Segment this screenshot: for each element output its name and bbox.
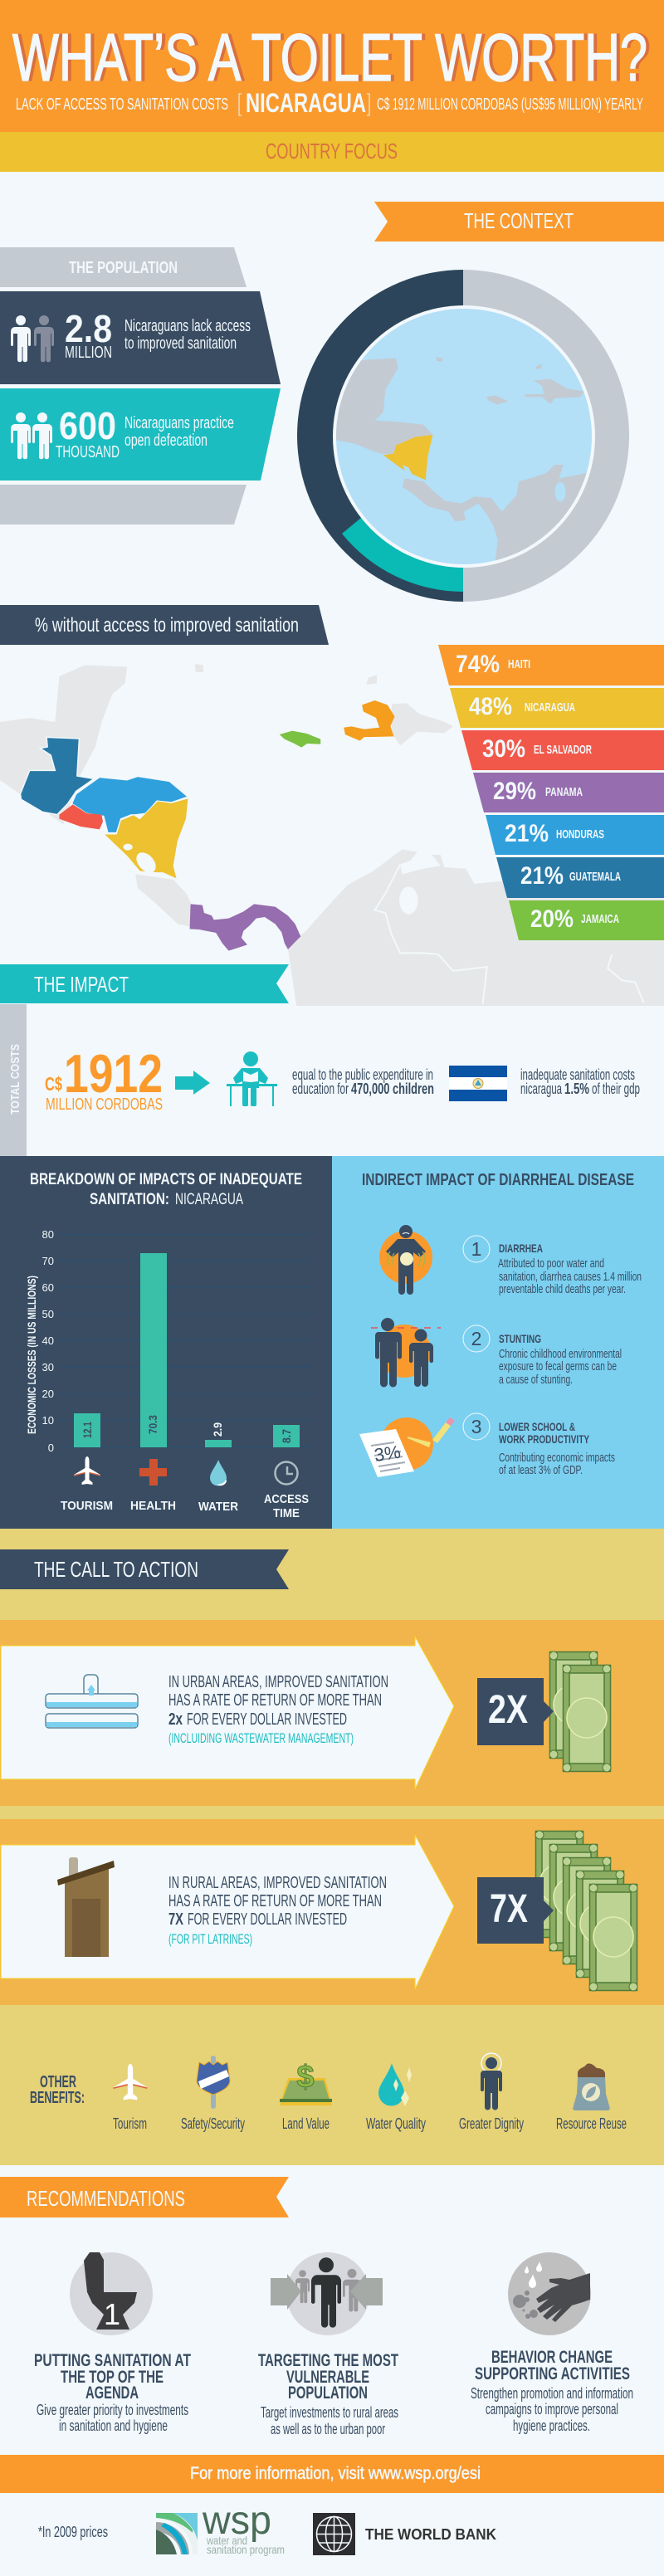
population heading xyxy=(0,247,247,287)
icon: money 7x xyxy=(535,1831,637,1991)
bar: jamaica: 20% xyxy=(530,905,574,933)
benefit: resource reuse xyxy=(556,2063,627,2132)
cost figure: MILLION CORDOBAS xyxy=(46,1095,163,1114)
item 1: 1 xyxy=(471,1238,481,1260)
logo: wsp: water and xyxy=(206,2534,247,2547)
bar: panama: 29% xyxy=(493,778,536,805)
logo: wsp xyxy=(156,2499,285,2556)
recommendation 1 xyxy=(34,2252,191,2434)
country: guatemala xyxy=(20,737,94,815)
bar: haiti: HAITI xyxy=(508,657,530,671)
item 3: Contributing economic impacts xyxy=(499,1451,615,1465)
callout: 7x: 7X xyxy=(490,1887,528,1931)
bar: honduras: HONDURAS xyxy=(556,827,604,842)
item 3: LOWER SCHOOL & xyxy=(499,1420,575,1433)
bar: honduras xyxy=(486,815,664,855)
donut chart with map xyxy=(297,270,629,602)
bar: jamaica xyxy=(509,900,664,940)
item 2: exposure to fecal germs can be xyxy=(499,1360,617,1373)
bar: el salvador: 30% xyxy=(482,735,525,763)
item 1: DIARRHEA xyxy=(499,1242,543,1255)
bar chart: 20 xyxy=(42,1388,54,1400)
ribbon: call to action: THE CALL TO ACTION xyxy=(34,1557,198,1582)
benefit: land value xyxy=(280,2060,332,2132)
bar: nicaragua xyxy=(450,688,664,728)
text: education equivalent xyxy=(292,1066,434,1097)
text: rec 2 xyxy=(258,2351,398,2437)
stat: 2.8 million: 2.8 xyxy=(65,307,112,350)
bar: honduras: 21% xyxy=(505,820,549,847)
bar: guatemala: GUATEMALA xyxy=(569,870,621,884)
other benefits xyxy=(30,2053,627,2132)
text: rec 1: Give greater priority to investments xyxy=(37,2402,188,2418)
bar: haiti: 74% xyxy=(456,651,500,678)
text: rec 2: VULNERABLE xyxy=(286,2368,369,2387)
item 3 xyxy=(463,1413,615,1477)
chart heading: SANITATION: xyxy=(90,1191,169,1208)
logo: world bank: THE WORLD BANK xyxy=(365,2526,496,2543)
population heading: THE POPULATION xyxy=(69,259,178,277)
stat: 600 thousand xyxy=(0,388,281,481)
icon: water drop xyxy=(210,1460,227,1486)
text: urban: FOR EVERY DOLLAR INVESTED xyxy=(187,1710,347,1729)
chart heading: NICARAGUA xyxy=(175,1191,243,1208)
text: rural: IN RURAL AREAS, IMPROVED SANITATION xyxy=(168,1874,387,1892)
item 1 xyxy=(463,1236,642,1296)
country focus band: COUNTRY FOCUS xyxy=(266,139,398,163)
bar: jamaica: JAMAICA xyxy=(581,912,619,926)
text: education equivalent: education for xyxy=(292,1081,349,1097)
text: urban: 2x xyxy=(168,1710,183,1729)
axis labels: TOURISM xyxy=(61,1499,113,1513)
bar chart: ECONOMIC LOSSES (IN US MILLIONS) xyxy=(25,1276,38,1434)
cost figure: C$ xyxy=(45,1073,62,1095)
panel: breakdown chart xyxy=(0,1156,332,1529)
ribbon: call to action xyxy=(0,1549,289,1589)
bar: nicaragua: NICARAGUA xyxy=(525,700,575,715)
ribbon: % without access: % without access to improved sanitation xyxy=(35,614,299,637)
subtitle: LACK OF ACCESS TO SANITATION COSTS xyxy=(16,95,228,114)
callout: 2x xyxy=(477,1678,554,1745)
country: panama xyxy=(190,904,300,951)
text: gdp cost: nicaragua xyxy=(520,1081,563,1097)
background land xyxy=(0,664,664,1006)
text: rural: 7X xyxy=(168,1910,183,1929)
benefit: tourism xyxy=(113,2064,147,2132)
stat: 600 thousand: THOUSAND xyxy=(56,443,120,461)
sidebar label xyxy=(0,1004,27,1156)
logo: wsp: sanitation program xyxy=(207,2543,285,2556)
icon: plane xyxy=(74,1456,100,1485)
benefit: dignity xyxy=(459,2053,524,2132)
text: rec 3 xyxy=(471,2348,633,2434)
stat: 2.8 million: MILLION xyxy=(65,344,112,362)
recommendation 3 xyxy=(471,2252,633,2434)
item 2: a cause of stunting. xyxy=(499,1373,573,1387)
subtitle xyxy=(16,88,643,118)
text: rec 2: Target investments to rural areas xyxy=(261,2404,398,2421)
ribbon: the context: THE CONTEXT xyxy=(464,208,574,233)
axis labels: HEALTH xyxy=(130,1499,176,1513)
icon: latrine xyxy=(57,1857,115,1957)
icon: vulnerable group xyxy=(271,2252,383,2335)
icon: health cross xyxy=(139,1459,167,1486)
ribbon: the impact xyxy=(0,964,289,1003)
bar: el salvador xyxy=(461,730,664,770)
text: gdp cost xyxy=(520,1066,640,1097)
icon: nicaragua flag xyxy=(449,1066,507,1101)
text: rec 1: THE TOP OF THE xyxy=(61,2368,164,2387)
bar chart: 50 xyxy=(42,1308,54,1320)
icon: stunting figures xyxy=(371,1318,441,1388)
item 2 xyxy=(463,1325,622,1387)
axis labels: ACCESS xyxy=(264,1492,309,1506)
stat: 600 thousand: open defecation xyxy=(124,432,208,450)
stat: 600 thousand: Nicaraguans practice xyxy=(124,414,234,432)
footnote: *In 2009 prices xyxy=(38,2524,108,2540)
text: urban: (INCLUIDING WASTEWATER MANAGEMENT) xyxy=(168,1730,354,1746)
text: rec 1: PUTTING SANITATION AT xyxy=(34,2351,191,2370)
footer banner: For more information, visit www.wsp.org/esi xyxy=(190,2464,481,2483)
stat: 2.8 million: to improved sanitation xyxy=(124,334,237,353)
text: gdp cost: 1.5% xyxy=(564,1081,589,1097)
icon: toilet: 1 xyxy=(104,2297,120,2331)
map: caribbean countries xyxy=(0,664,664,1006)
panel: indirect impact xyxy=(332,1156,664,1529)
bar chart: 8.7 xyxy=(280,1429,293,1443)
benefit: land value: Land Value xyxy=(282,2115,330,2132)
country: jamaica xyxy=(280,731,320,748)
icon: sick person xyxy=(379,1225,432,1295)
bar: haiti xyxy=(438,645,664,685)
item 3: of at least 3% of GDP. xyxy=(499,1464,583,1477)
band: urban return xyxy=(0,1620,664,1806)
bar: nicaragua: 48% xyxy=(469,693,512,720)
text: urban: IN URBAN AREAS, IMPROVED SANITATION xyxy=(168,1673,388,1691)
benefit: land value: $ xyxy=(296,2060,315,2095)
bar chart: 10 xyxy=(42,1414,54,1427)
bar: panama xyxy=(473,773,664,812)
stat: 600 thousand: 600 xyxy=(59,404,116,447)
subtitle: NICARAGUA xyxy=(246,88,366,118)
callout: 7x xyxy=(477,1877,554,1944)
cost figure xyxy=(45,1043,163,1114)
text: education equivalent: 470,000 children xyxy=(351,1081,434,1097)
bar: panama: PANAMA xyxy=(545,785,583,799)
panel: call to action xyxy=(0,1529,664,2165)
cost figure: 1912 xyxy=(64,1043,163,1104)
axis labels: WATER xyxy=(198,1500,238,1514)
logo: world bank xyxy=(313,2513,496,2555)
text: rec 3: BEHAVIOR CHANGE xyxy=(491,2348,613,2367)
icon: paper and pencil: 3% xyxy=(373,1442,402,1466)
bar chart: 70.3 xyxy=(146,1415,159,1434)
benefits heading: OTHER xyxy=(40,2073,76,2091)
benefit: safety xyxy=(181,2056,245,2132)
text: rural: FOR EVERY DOLLAR INVESTED xyxy=(188,1910,347,1929)
icon: money 2x xyxy=(549,1651,611,1772)
text: rec 2: TARGETING THE MOST xyxy=(258,2351,398,2370)
text: rec 3: hygiene practices. xyxy=(513,2417,590,2434)
band: rural return xyxy=(0,1819,664,2005)
bar chart: 30 xyxy=(42,1361,54,1373)
benefit: safety: Safety/Security xyxy=(181,2115,245,2132)
text: education equivalent: equal to the public expenditure in xyxy=(292,1066,433,1083)
text: rec 1: in sanitation and hygiene xyxy=(59,2417,168,2434)
text: rural: (FOR PIT LATRINES) xyxy=(168,1931,252,1947)
bar list: countries xyxy=(438,645,664,940)
footer banner xyxy=(0,2455,664,2493)
bar chart: 40 xyxy=(42,1334,54,1347)
icon: child at desk xyxy=(227,1051,277,1106)
ribbon: % without access xyxy=(0,605,329,645)
text: rec 2: as well as to the urban poor xyxy=(271,2421,385,2437)
bar chart: 2.9 xyxy=(211,1422,224,1437)
text: urban: HAS A RATE OF RETURN OF MORE THAN xyxy=(168,1691,382,1710)
item 2: STUNTING xyxy=(499,1332,541,1345)
axis labels: TIME xyxy=(273,1506,300,1520)
bar chart: 80 xyxy=(42,1228,54,1241)
chart heading xyxy=(30,1171,302,1208)
bar: guatemala: 21% xyxy=(520,862,564,890)
panel: total costs xyxy=(0,1004,664,1156)
axis labels xyxy=(61,1492,309,1520)
recommendation 2 xyxy=(258,2252,398,2437)
text: rural xyxy=(168,1874,387,1947)
text: urban xyxy=(168,1673,388,1746)
icon: paper and pencil xyxy=(359,1417,455,1477)
bar: guatemala xyxy=(496,857,664,898)
text: rec 1 xyxy=(34,2351,191,2434)
country: honduras xyxy=(72,777,188,832)
callout: 2x: 2X xyxy=(488,1688,528,1732)
sidebar label: TOTAL COSTS xyxy=(8,1044,22,1115)
benefit: water quality xyxy=(366,2063,426,2132)
item 2: 2 xyxy=(471,1328,481,1349)
benefit: tourism: Tourism xyxy=(113,2115,147,2132)
bar chart: 0 xyxy=(48,1442,54,1454)
chart heading: BREAKDOWN OF IMPACTS OF INADEQUATE xyxy=(30,1171,302,1188)
stat: 2.8 million: Nicaraguans lack access xyxy=(124,317,251,335)
benefit: water quality: Water Quality xyxy=(366,2115,426,2132)
country: nicaragua xyxy=(104,798,188,879)
text: rec 1: AGENDA xyxy=(85,2383,139,2403)
country focus band xyxy=(0,132,664,172)
ribbon: recommendations: RECOMMENDATIONS xyxy=(27,2186,185,2211)
item 3: 3 xyxy=(471,1416,481,1437)
panel: the population xyxy=(0,247,281,524)
item 1: Attributed to poor water and xyxy=(498,1257,604,1271)
country: el salvador xyxy=(59,804,103,829)
bar: el salvador: EL SALVADOR xyxy=(534,743,592,757)
ribbon: the context xyxy=(374,202,664,242)
header banner xyxy=(0,0,664,132)
map: nicaragua region xyxy=(336,357,586,561)
arrow xyxy=(175,1071,210,1095)
icon: toilet xyxy=(70,2252,153,2335)
bar chart: 70 xyxy=(42,1255,54,1267)
ribbon: the impact: THE IMPACT xyxy=(34,972,129,997)
logo: wsp: wsp xyxy=(202,2499,271,2543)
bar chart: 60 xyxy=(42,1281,54,1294)
benefits heading xyxy=(30,2073,85,2107)
icon: clock xyxy=(276,1462,297,1484)
ribbon: recommendations xyxy=(0,2177,289,2217)
icon: hand washing xyxy=(508,2252,591,2335)
benefit: dignity: Greater Dignity xyxy=(459,2115,524,2132)
item 3: WORK PRODUCTIVITY xyxy=(499,1432,589,1446)
text: rural: HAS A RATE OF RETURN OF MORE THAN xyxy=(168,1892,382,1910)
stat: 2.8 million xyxy=(0,291,281,384)
bar chart: 12.1 xyxy=(81,1422,94,1438)
text: rec 2: POPULATION xyxy=(288,2383,368,2403)
benefits heading: BENEFITS: xyxy=(30,2089,85,2107)
icon: pipes xyxy=(46,1675,138,1728)
bar chart xyxy=(25,1228,312,1454)
country: haiti xyxy=(344,700,395,741)
